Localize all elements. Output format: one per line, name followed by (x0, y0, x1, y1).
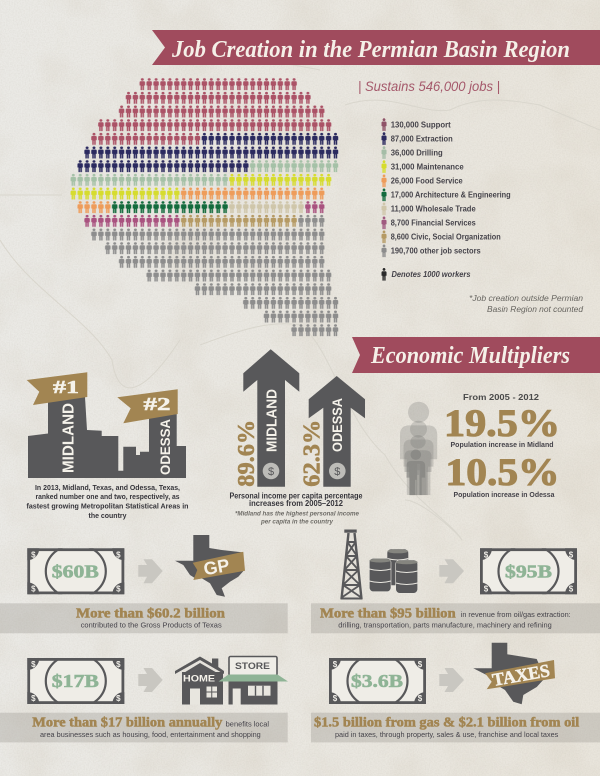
bill: $95B: $ (484, 550, 489, 559)
ribbon: #1 (27, 372, 87, 405)
population statistics: From 2005 - 2012 (463, 392, 539, 402)
icon: Texas GP (175, 535, 245, 597)
bill: $3.6B: $ (418, 660, 423, 669)
bill: $17B: $17B (52, 671, 99, 691)
text: city ranking description: In 2013, Midland, Texas, and Odessa, Texas, (35, 483, 180, 492)
bill: $95B: $ (569, 550, 574, 559)
legend: 17,000 Architecture & Engineering (391, 191, 511, 200)
bill: $95B (480, 548, 577, 594)
icon: home (175, 656, 224, 704)
arrow: oil to bill (439, 559, 464, 583)
section banner: economic multipliers (352, 337, 600, 373)
text: income description (230, 492, 363, 526)
population statistics (444, 392, 560, 499)
icon: Texas taxes (473, 643, 555, 704)
legend (382, 118, 511, 281)
bill: $3.6B: $3.6B (351, 671, 403, 691)
text: income description: per capita in the country (260, 520, 334, 526)
bill: $60B: $ (31, 584, 36, 593)
bill: $17B: $ (31, 694, 36, 703)
strip: $95 billion: More than $95 billion (320, 606, 456, 622)
arrow: bill to home and store (138, 668, 163, 692)
footnote: job creation (469, 294, 584, 314)
text: city ranking description: ranked number one and two, respectively, as (36, 492, 180, 501)
section banner: economic multipliers: Economic Multipliers (370, 343, 570, 369)
footnote: job creation: *Job creation outside Permian (469, 294, 584, 303)
strip: $60.2 billion: contributed to the Gross Products of Texas (81, 620, 222, 630)
icon: Texas taxes: TAXES (491, 660, 551, 690)
strip: $95 billion: in revenue from oil/gas extraction: (461, 610, 571, 619)
label: Midland: MIDLAND (60, 403, 78, 473)
strip: $60.2 billion (0, 603, 288, 633)
text: city ranking description: the country (88, 511, 127, 520)
legend: 190,700 other job sectors (391, 247, 481, 256)
arrow chart: Midland income: $ (268, 466, 274, 478)
text: income description: Personal income per capita percentage (230, 492, 363, 500)
text: income description: increases from 2005–2012 (249, 499, 344, 508)
bill: $60B: $ (116, 584, 121, 593)
arrow chart: Odessa income (300, 376, 365, 487)
population statistics: Population increase in Midland (450, 440, 554, 449)
bill: $3.6B: $ (333, 660, 338, 669)
bill: $17B: $ (31, 660, 36, 669)
bill: $17B: $ (116, 660, 121, 669)
text: income description: *Midland has the highest personal income (235, 512, 360, 518)
arrow chart: Midland income (234, 349, 299, 487)
bill: $60B: $60B (52, 561, 99, 581)
arrow chart: Odessa income: 62.3% (300, 420, 326, 487)
bill: $60B: $ (31, 550, 36, 559)
title banner: Job Creation in the Permian Basin Region (171, 37, 570, 63)
strip: $95 billion (311, 603, 600, 633)
bill: $3.6B (329, 658, 426, 704)
strip: taxes: $1.5 billion from gas & $2.1 billion from oil (314, 716, 579, 731)
arrow chart: Odessa income: ODESSA (329, 398, 345, 452)
population statistics: 19.5% (444, 402, 560, 445)
bill: $3.6B: $ (333, 694, 338, 703)
bill: $17B (27, 658, 124, 704)
icon: Texas GP: GP (202, 555, 231, 579)
icon: store (218, 656, 288, 704)
strip: taxes (311, 713, 600, 742)
footnote: job creation: Basin Region not counted (487, 305, 584, 314)
ribbon: #2 (117, 389, 178, 423)
legend: 8,700 Financial Services (391, 219, 476, 228)
arrow: bill to taxes (439, 668, 464, 692)
bill: $17B: $ (116, 694, 121, 703)
legend: Denotes 1000 workers (392, 270, 471, 279)
bill: $95B: $95B (505, 561, 552, 581)
text: city ranking description: fastest growing Metropolitan Statistical Areas in (26, 502, 189, 510)
legend: 87,000 Extraction (391, 134, 453, 144)
strip: $17 billion (0, 713, 288, 742)
icon: shrinking population figures (400, 402, 437, 495)
subheading: sustains jobs: | Sustains 546,000 jobs | (358, 78, 500, 94)
bill: $95B: $ (569, 584, 574, 593)
strip: taxes: paid in taxes, through property, sales & use, franchise and local taxes (335, 730, 559, 739)
icon: store: STORE (235, 661, 270, 671)
arrow chart: Odessa income: $ (334, 466, 340, 478)
legend: 8,600 Civic, Social Organization (391, 233, 501, 242)
bill: $60B (27, 548, 124, 594)
label: Odessa: ODESSA (157, 419, 173, 475)
ribbon: #1: #1 (53, 377, 79, 397)
strip: $17 billion: area businesses such as housing, food, entertainment and shopping (40, 730, 261, 739)
strip: $60.2 billion: More than $60.2 billion (76, 607, 225, 622)
strip: $95 billion: drilling, transportation, parts manufacture, machinery and refining (338, 620, 552, 630)
bill: $95B: $ (484, 584, 489, 593)
legend: 11,000 Wholesale Trade (391, 205, 476, 214)
ribbon: #2: #2 (144, 394, 170, 414)
icon: oil barrels (369, 549, 418, 593)
arrow: bill to GP (138, 559, 163, 583)
city ranking skyline (27, 372, 186, 478)
strip: $17 billion: More than $17 billion annually (32, 716, 222, 731)
population statistics: 10.5% (446, 451, 560, 494)
arrow chart: Midland income: 89.6% (234, 420, 260, 487)
legend: 26,000 Food Service (391, 177, 463, 186)
arrow chart: Midland income: MIDLAND (264, 389, 280, 452)
icon: home: HOME (183, 674, 215, 684)
legend: 130,000 Support (391, 120, 451, 130)
text: city ranking description (26, 483, 189, 520)
population statistics: Population increase in Odessa (454, 490, 555, 499)
legend: 31,000 Maintenance (391, 162, 464, 172)
bill: $60B: $ (116, 550, 121, 559)
icon: oil derrick (340, 530, 362, 599)
bill: $3.6B: $ (418, 694, 423, 703)
legend: 36,000 Drilling (391, 148, 443, 158)
strip: $17 billion: benefits local (226, 722, 269, 728)
pictogram: 546 worker figures shaped like Texas (70, 77, 339, 337)
